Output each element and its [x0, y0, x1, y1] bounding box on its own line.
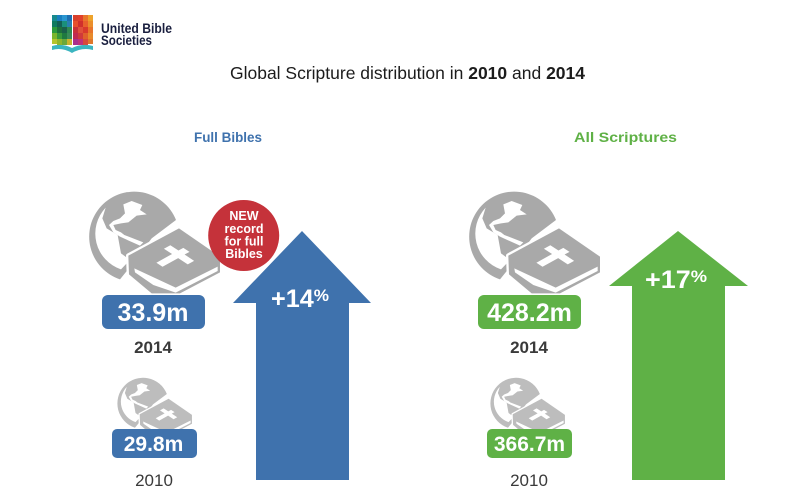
panel: full bibles [89, 129, 371, 490]
icon: globe and book 2010 [117, 378, 192, 436]
value box 2010: 366.7m [494, 433, 565, 456]
badge: new record: Bibles [225, 247, 263, 261]
arrow label: % [691, 267, 707, 286]
icon: globe and book 2014 [89, 192, 220, 293]
logo: United Bible Societies [52, 15, 172, 53]
badge: new record [208, 200, 279, 271]
year label 2014: 2014 [134, 338, 172, 357]
badge: new record: record [225, 222, 263, 236]
arrow: up 14 percent [233, 231, 371, 480]
title: Global Scripture distribution in 2010 and 2014 [230, 63, 585, 83]
logo wave [52, 45, 93, 53]
icon: globe and book 2010 [490, 378, 565, 436]
year label 2010: 2010 [135, 471, 173, 490]
value box 2014 [478, 295, 581, 329]
logo wordmark: United Bible [101, 20, 172, 36]
badge: new record: NEW [229, 209, 259, 223]
year label 2010: 2010 [510, 471, 548, 490]
value box 2010 [112, 429, 197, 458]
value box 2010 [487, 429, 572, 458]
badge: new record: for full [225, 234, 263, 248]
logo wordmark [101, 20, 172, 48]
logo right page [73, 15, 93, 45]
value box 2014 [102, 295, 205, 329]
year label 2014: 2014 [510, 338, 548, 357]
panel: all scriptures [469, 129, 748, 490]
value box 2010: 29.8m [124, 433, 183, 456]
arrow label: +14 [271, 285, 313, 313]
icon: globe and book 2014 [469, 192, 600, 293]
arrow label: % [314, 286, 329, 305]
value box 2014: 428.2m [487, 299, 572, 327]
value box 2014: 33.9m [118, 299, 188, 327]
arrow: up 17 percent [609, 231, 748, 480]
heading: full bibles: Full Bibles [194, 129, 262, 145]
logo wordmark: Societies [101, 32, 152, 48]
logo left page [52, 15, 72, 45]
arrow label: +17 [645, 266, 687, 294]
heading: all scriptures: All Scriptures [574, 129, 677, 145]
